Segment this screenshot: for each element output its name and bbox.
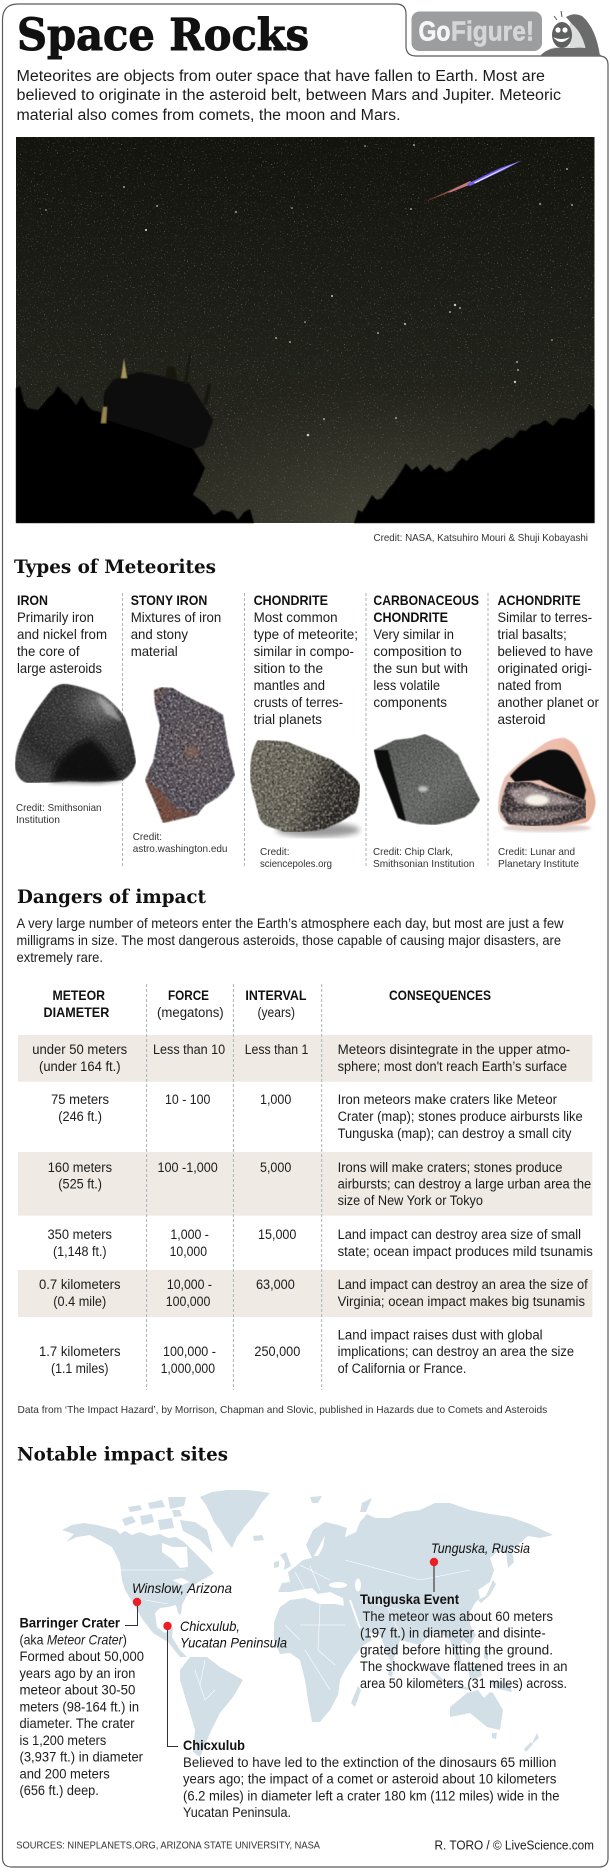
credit: carbonaceous: Credit: Chip Clark, [373, 846, 453, 858]
logo: Go Figure: Figure! [451, 16, 534, 46]
table header: METEOR [52, 988, 105, 1003]
panel: carbonaceous chondrite: Very similar in [373, 626, 454, 642]
text: Barringer Crater: Formed about 50,000 [20, 1648, 144, 1664]
table row: 160 meters: 5,000 [260, 1160, 291, 1175]
table row: 350 meters [48, 1227, 593, 1259]
text: Barringer Crater: is 1,200 meters [20, 1732, 106, 1748]
text: Chicxulub: (6.2 miles) in diameter left a crater 180 km (112 miles) wide in the [183, 1788, 560, 1804]
marker: Chicxulub [163, 1618, 287, 1746]
text: Barringer Crater: Barringer Crater [20, 1614, 121, 1630]
data source note: Data from ‘The Impact Hazard’, by Morrison, Chapman and Slovic, published in Hazards due to Comets and Asteroids [18, 1404, 547, 1416]
table row: 350 meters: 350 meters [48, 1227, 112, 1242]
table row: under 50 meters: Less than 1 [245, 1042, 308, 1057]
credit: chondrite [260, 846, 332, 870]
table row: under 50 meters: sphere; most don't reach Earth’s surface [338, 1059, 567, 1074]
icon: carbonaceous rock [374, 734, 480, 825]
panel: iron meteorite [15, 592, 136, 826]
credit: stony iron: Credit: [133, 831, 162, 843]
table row: 0.7 kilometers: 10,000 - [167, 1277, 212, 1292]
panel: achondrite: asteroid [498, 711, 546, 727]
photo credit: Credit: NASA, Katsuhiro Mouri & Shuji Kobayashi [374, 532, 588, 544]
table row: under 50 meters: Meteors disintegrate in the upper atmo- [338, 1042, 570, 1057]
credit: achondrite: Planetary Institute [498, 858, 579, 870]
table header: FORCE [168, 988, 209, 1003]
text: Chicxulub: Chicxulub [183, 1737, 245, 1753]
logo: Go Figure [412, 11, 602, 56]
text: Tunguska Event: Tunguska Event [360, 1591, 459, 1607]
panel: achondrite: Similar to terres- [498, 609, 592, 625]
credit: iron [16, 802, 102, 826]
table row: 0.7 kilometers: Land impact can destroy an area the size of [338, 1277, 588, 1292]
panel: stony iron meteorite: material [131, 643, 178, 659]
table row: 160 meters: 100 -1,000 [158, 1160, 218, 1175]
panel: carbonaceous chondrite: CARBONACEOUS [373, 592, 479, 608]
table row: 1.7 kilometers: (1.1 miles) [51, 1361, 108, 1376]
table row: under 50 meters [32, 1042, 570, 1074]
table row: 0.7 kilometers: Virginia; ocean impact makes big tsunamis [338, 1294, 585, 1309]
table row: 75 meters: 10 - 100 [165, 1092, 210, 1107]
table header: CONSEQUENCES [389, 988, 491, 1003]
text: Barringer Crater: years ago by an iron [20, 1665, 135, 1681]
heading: Dangers of impact: Dangers of impact [17, 886, 206, 908]
text: Barringer Crater: meters (98-164 ft.) in [20, 1698, 139, 1714]
silhouette: tower and trees left [16, 352, 254, 523]
credit: carbonaceous [373, 846, 475, 870]
text: Barringer Crater: diameter. The crater [20, 1715, 135, 1731]
credit: carbonaceous: Smithsonian Institution [373, 858, 475, 870]
table row: 1.7 kilometers: 100,000 - [163, 1344, 216, 1359]
panel: chondrite: CHONDRITE [254, 592, 328, 608]
table header: INTERVAL [245, 988, 306, 1003]
logo: Go Figure: Go [418, 16, 450, 46]
table row: 75 meters: Iron meteors make craters like Meteor [338, 1092, 557, 1107]
marker: Winslow Arizona [125, 1580, 232, 1626]
panel: chondrite: Most common [254, 609, 338, 625]
panel: achondrite: nated from [498, 677, 562, 693]
panel: achondrite [498, 592, 599, 870]
intro text: believed to originate in the asteroid belt, between Mars and Jupiter. Meteoric [16, 87, 561, 104]
table row: 75 meters [51, 1092, 583, 1141]
panel: iron meteorite: IRON [17, 592, 48, 608]
heading: Notable impact sites: Notable impact sites [17, 1444, 228, 1466]
table row: 1.7 kilometers [39, 1328, 574, 1376]
table header [44, 988, 491, 1020]
text: dangers intro [16, 915, 564, 965]
credit: iron: Credit: Smithsonian [16, 802, 102, 814]
panel: iron meteorite: large asteroids [17, 660, 102, 676]
photo: meteor in night sky [16, 137, 594, 523]
credit: achondrite: Credit: Lunar and [498, 846, 575, 858]
table row: under 50 meters: Less than 10 [153, 1042, 225, 1057]
table row: 350 meters: 1,000 - [170, 1227, 209, 1242]
icon: iron rock [15, 684, 136, 783]
panel: chondrite: type of meteorite; [254, 626, 358, 642]
table row: 160 meters [48, 1160, 591, 1208]
table row: under 50 meters: (under 164 ft.) [39, 1059, 121, 1074]
table row: 0.7 kilometers: 0.7 kilometers [39, 1277, 121, 1292]
text: Tunguska Event: The shockwave flattened trees in an [360, 1658, 568, 1674]
panel: achondrite: originated origi- [498, 660, 592, 676]
text: Barringer Crater [20, 1614, 144, 1798]
panel: achondrite: believed to have [498, 643, 593, 659]
table row: 160 meters: (525 ft.) [58, 1176, 102, 1192]
label: Chicxulub, Yucatan Peninsula: Yucatan Peninsula [180, 1634, 287, 1650]
footer: sources: SOURCES: NINEPLANETS.ORG, ARIZONA STATE UNIVERSITY, NASA [16, 1840, 320, 1852]
text: dangers intro: extremely rare. [16, 949, 103, 965]
table row: 1.7 kilometers: implications; can destroy an area the size [338, 1344, 574, 1359]
panel: carbonaceous chondrite: CHONDRITE [373, 609, 448, 625]
panel: achondrite: trial basalts; [498, 626, 567, 642]
table header: (years) [258, 1005, 295, 1020]
table row: 350 meters: 15,000 [258, 1227, 296, 1242]
table row: 75 meters: Tunguska (map); can destroy a small city [338, 1126, 572, 1141]
text: dangers intro: milligrams in size. The most dangerous asteroids, those capable of causing major disasters, are [16, 932, 561, 948]
table header: DIAMETER [44, 1005, 110, 1020]
panel: carbonaceous chondrite [373, 592, 480, 870]
table row: 75 meters: (246 ft.) [58, 1109, 102, 1124]
panel: chondrite: trial planets [254, 711, 322, 727]
panel: iron meteorite: the core of [17, 643, 80, 659]
intro text: Meteorites are objects from outer space that have fallen to Earth. Most are [16, 68, 545, 85]
panel: chondrite: sition to the [254, 660, 323, 676]
text: Barringer Crater: (aka Meteor Crater) [20, 1632, 127, 1648]
panel: achondrite: another planet or [498, 694, 599, 710]
credit: chondrite: sciencepoles.org [260, 858, 332, 870]
panel: iron meteorite: and nickel from [17, 626, 107, 642]
credit: stony iron [133, 831, 228, 855]
panel: carbonaceous chondrite: the sun but with [373, 660, 468, 676]
table row: 75 meters: 75 meters [51, 1092, 109, 1107]
table row: 160 meters: 160 meters [48, 1160, 112, 1175]
text: Chicxulub: Yucatan Peninsula. [183, 1804, 291, 1820]
text: Chicxulub: Believed to have led to the extinction of the dinosaurs 65 million [183, 1754, 556, 1770]
panel: stony iron meteorite: Mixtures of iron [131, 609, 221, 625]
table row: 350 meters: 10,000 [170, 1244, 207, 1259]
text: Tunguska Event: The meteor was about 60 meters [362, 1608, 553, 1624]
label: Winslow, Arizona: Winslow, Arizona [132, 1580, 232, 1596]
table row: 0.7 kilometers: (0.4 mile) [53, 1294, 106, 1309]
table row: 75 meters: 1,000 [260, 1092, 291, 1107]
panel: chondrite: crusts of terres- [254, 694, 343, 710]
intro text [16, 68, 561, 124]
credit: iron: Institution [16, 814, 60, 826]
label: Chicxulub, Yucatan Peninsula [180, 1618, 287, 1650]
credit: chondrite: Credit: [260, 846, 290, 858]
title: Space Rocks [17, 10, 309, 61]
panel: achondrite: ACHONDRITE [498, 592, 581, 608]
panel: stony iron meteorite: and stony [131, 626, 188, 642]
footer: credit: R. TORO / © LiveScience.com [434, 1838, 594, 1852]
panel: carbonaceous chondrite: components [373, 694, 447, 710]
icon: chondrite rock [250, 740, 360, 837]
table row: 350 meters: Land impact can destroy area size of small [338, 1227, 581, 1242]
table row: 1.7 kilometers: of California or France. [338, 1361, 466, 1376]
table row: 75 meters: Crater (map); stones produce airbursts like [338, 1109, 583, 1124]
label: Chicxulub, Yucatan Peninsula: Chicxulub, [180, 1618, 240, 1634]
text: Barringer Crater: meteor about 30-50 [20, 1682, 136, 1698]
text: Tunguska Event: (197 ft.) in diameter and disinte- [360, 1624, 546, 1640]
text: Barringer Crater: and 200 meters [20, 1766, 110, 1782]
text: Tunguska Event: grated before hitting the ground. [360, 1642, 553, 1658]
table row: 0.7 kilometers [39, 1277, 588, 1309]
text: Chicxulub: years ago; the impact of a comet or asteroid about 10 kilometers [183, 1770, 556, 1786]
panel: chondrite [250, 592, 360, 870]
panel: iron meteorite: Primarily iron [17, 609, 94, 625]
table row: under 50 meters: under 50 meters [32, 1042, 127, 1057]
label: Tunguska, Russia: Tunguska, Russia [431, 1540, 530, 1556]
icon: achondrite rock [498, 738, 596, 832]
table row: 350 meters: (1,148 ft.) [53, 1244, 107, 1259]
meteor streak [424, 160, 522, 202]
table row: 0.7 kilometers: 100,000 [166, 1294, 210, 1309]
credit: achondrite [498, 846, 579, 870]
text: Barringer Crater: (656 ft.) deep. [20, 1782, 99, 1798]
table row: 1.7 kilometers: 1,000,000 [161, 1361, 215, 1376]
panel: chondrite: similar in compo- [254, 643, 354, 659]
panel: stony iron meteorite [131, 592, 235, 855]
panel: carbonaceous chondrite: composition to [373, 643, 462, 659]
table row: 160 meters: size of New York or Tokyo [338, 1193, 483, 1208]
panel: stony iron meteorite: STONY IRON [131, 592, 207, 608]
text: dangers intro: A very large number of meteors enter the Earth’s atmosphere each day, but most are just a few [16, 915, 564, 931]
panel: carbonaceous chondrite: less volatile [373, 677, 440, 693]
text: Tunguska Event [360, 1591, 568, 1691]
heading: Types of Meteorites: Types of Meteorites [14, 556, 216, 578]
table header: (megatons) [157, 1005, 224, 1020]
intro text: material also comes from comets, the moon and Mars. [16, 107, 400, 124]
text: Chicxulub [183, 1737, 560, 1820]
credit: stony iron: astro.washington.edu [133, 843, 228, 855]
table: dangers of impact [18, 984, 593, 1390]
text: Barringer Crater: (3,937 ft.) in diameter [20, 1748, 143, 1764]
world map [62, 1490, 553, 1757]
table row: 160 meters: Irons will make craters; stones produce [338, 1160, 562, 1175]
table row: 1.7 kilometers: 250,000 [254, 1344, 300, 1359]
text: Tunguska Event: area 50 kilometers (31 miles) across. [360, 1675, 567, 1691]
panel: chondrite: mantles and [254, 677, 325, 693]
icon: stony iron rock [145, 687, 235, 823]
table row: 1.7 kilometers: 1.7 kilometers [39, 1344, 121, 1359]
table row: 1.7 kilometers: Land impact raises dust with global [338, 1328, 543, 1342]
silhouette: trees right [354, 404, 594, 523]
marker: Tunguska [430, 1540, 530, 1592]
table row: 0.7 kilometers: 63,000 [256, 1277, 295, 1292]
table row: 350 meters: state; ocean impact produces mild tsunamis [338, 1244, 593, 1259]
table row: 160 meters: airbursts; can destroy a large urban area the [338, 1176, 591, 1192]
